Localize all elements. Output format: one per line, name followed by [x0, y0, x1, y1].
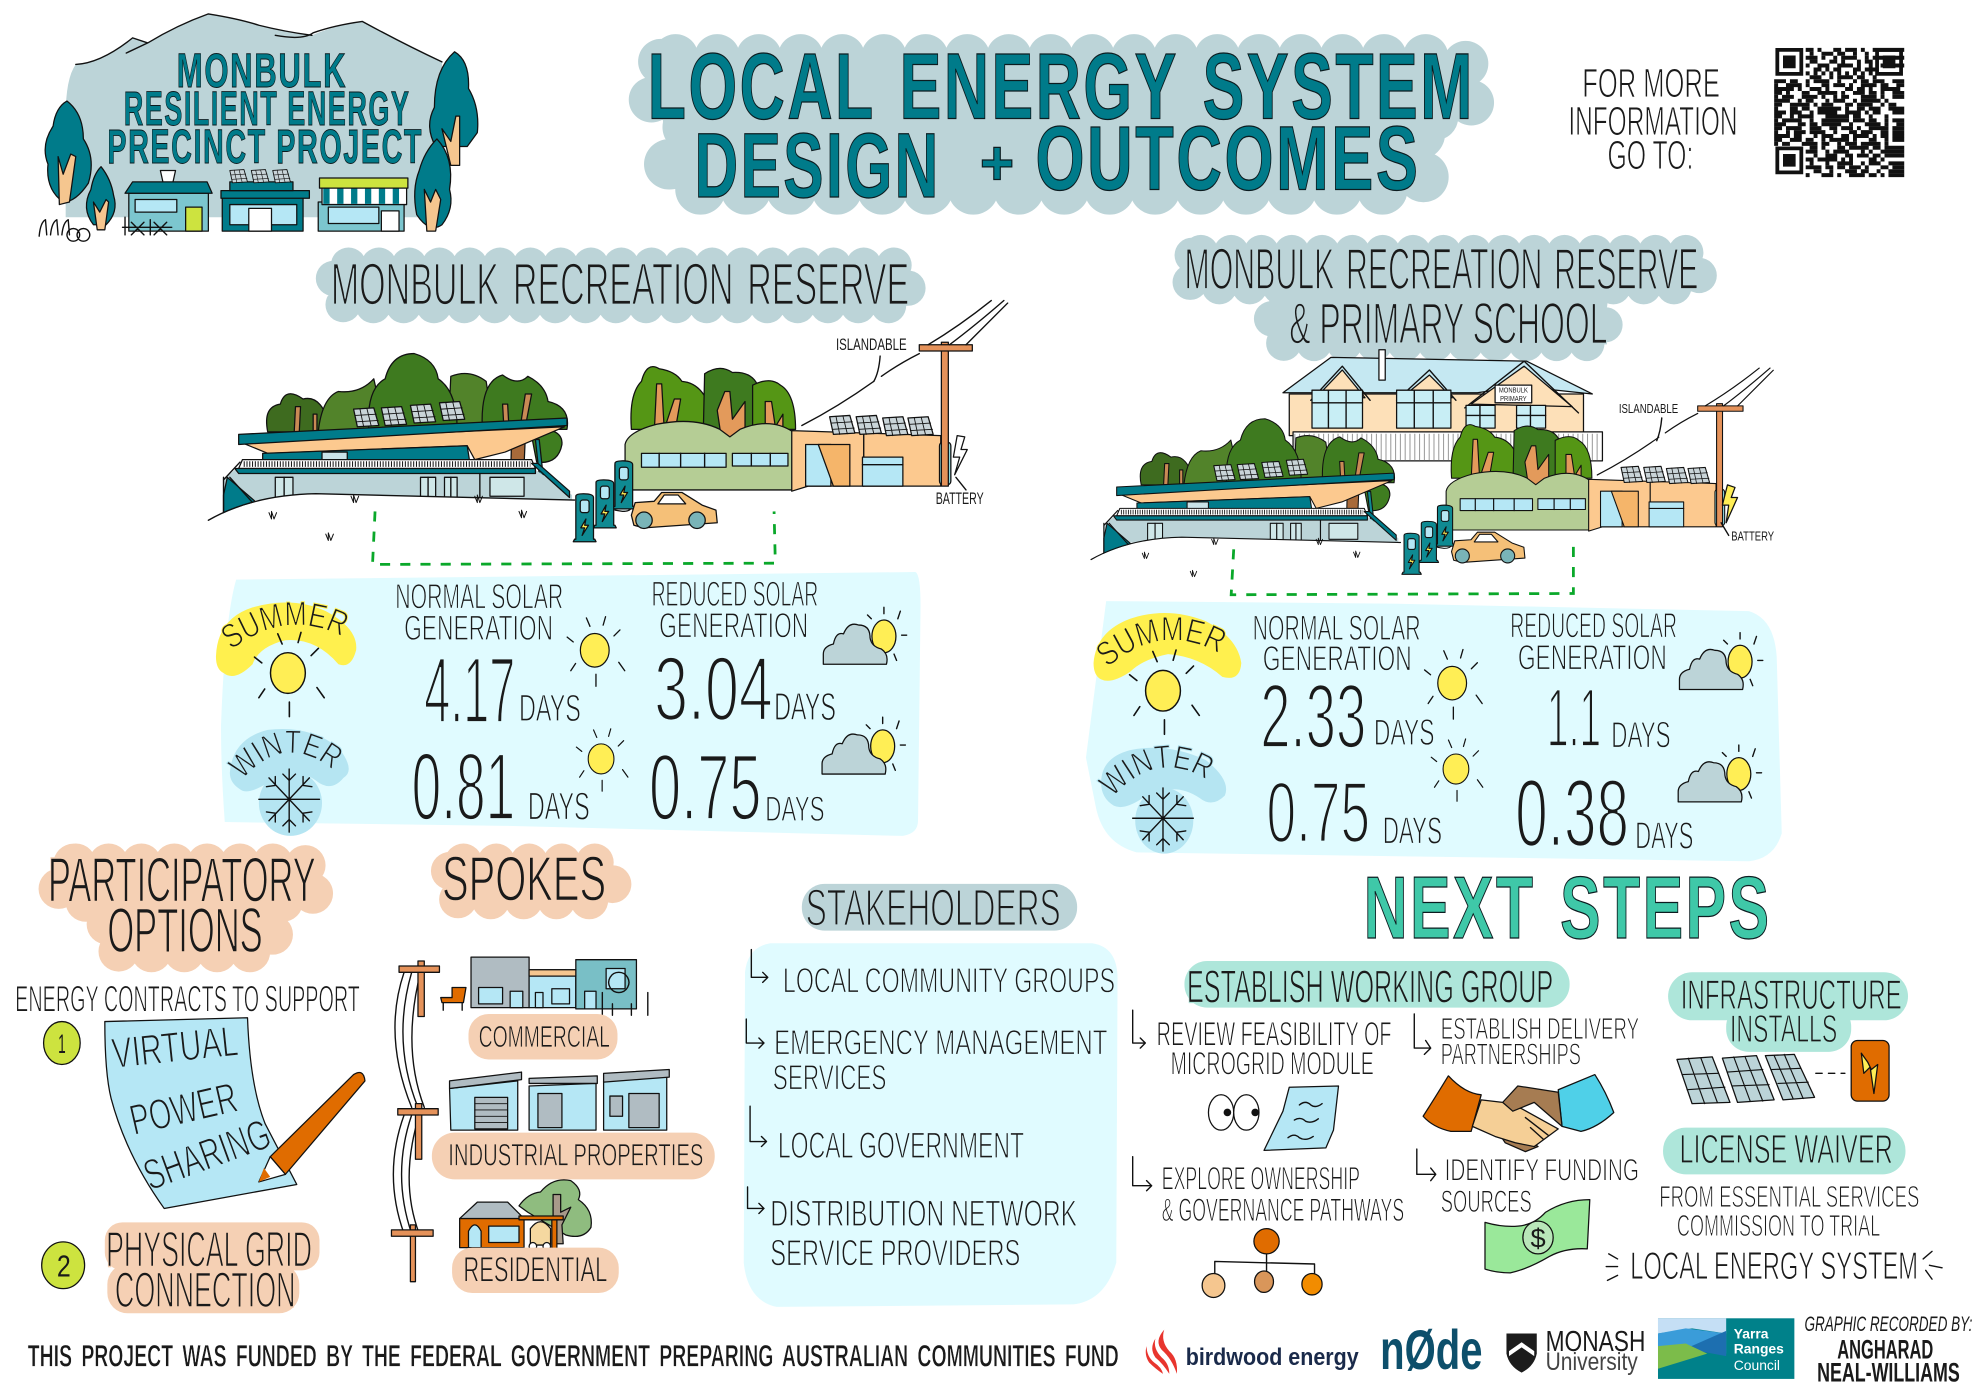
icon: sun normal summer	[567, 617, 625, 686]
more information note	[1568, 60, 1738, 178]
heading: establish working group: ESTABLISH WORKING GROUP	[1187, 961, 1553, 1013]
icon: money note: $	[1530, 1224, 1546, 1254]
logo: Monash University: MONASH	[1546, 1326, 1645, 1358]
recreation centre illustration	[202, 354, 575, 546]
stakeholder: distribution network service providers: SERVICE PROVIDERS	[770, 1232, 1020, 1273]
footer: funding statement: THIS PROJECT WAS FUNDED BY THE FEDERAL GOVERNMENT PREPARING AUSTRALIAN COMMUNITIES FUND	[28, 1337, 1119, 1373]
more information note: FOR MORE	[1582, 60, 1720, 106]
panel: stakeholders	[744, 879, 1118, 1307]
winter badge: WINTER	[1096, 744, 1214, 794]
column label: reduced solar generation: REDUCED SOLAR	[652, 575, 818, 614]
winter badge	[226, 729, 349, 836]
scene: recreation reserve	[202, 301, 1008, 564]
stakeholder: emergency management services: SERVICES	[773, 1059, 886, 1098]
school sign: PRIMARY	[1500, 394, 1527, 403]
icon: eyes reading document	[1208, 1086, 1339, 1150]
label: islandable: ISLANDABLE	[836, 335, 907, 354]
icon: cloud sun summer	[1679, 633, 1763, 689]
label: battery: BATTERY	[936, 489, 984, 508]
icon: pencil	[259, 1072, 365, 1182]
green dashed link	[373, 511, 775, 564]
icon: solar panels	[1677, 1054, 1815, 1104]
icon: battery	[1851, 1040, 1889, 1101]
title text: LOCAL ENERGY SYSTEM	[648, 34, 1475, 139]
option 2: physical grid connection	[105, 1221, 319, 1318]
stakeholder: local government	[750, 1106, 1024, 1166]
heading: Monbulk Recreation Reserve: MONBULK RECREATION RESERVE	[331, 250, 909, 317]
stat: winter normal: DAYS	[1383, 811, 1442, 853]
number 2 badge: 2	[57, 1251, 71, 1284]
title text: +	[980, 128, 1018, 198]
school sign	[1495, 385, 1532, 403]
step: review feasibility: MICROGRID MODULE	[1171, 1045, 1374, 1082]
stat: summer normal: DAYS	[1374, 712, 1434, 753]
logo: birdwood energy: birdwood energy	[1186, 1344, 1359, 1371]
stat: summer normal: 2.33	[1260, 667, 1366, 768]
label: industrial properties	[432, 1133, 715, 1179]
scene: reserve and primary school	[1086, 350, 1774, 595]
title text: DESIGN	[695, 114, 941, 217]
label: residential: RESIDENTIAL	[463, 1251, 607, 1290]
option 1: virtual power sharing document: SHARING	[137, 1110, 277, 1200]
heading: infrastructure installs	[1668, 971, 1908, 1052]
stat: winter reduced: DAYS	[1635, 816, 1693, 858]
label: battery: BATTERY	[1731, 528, 1774, 543]
text: license waiver detail	[1659, 1181, 1919, 1243]
stat: summer reduced: DAYS	[1611, 715, 1671, 756]
heading: Monbulk Recreation Reserve and Primary School	[1184, 237, 1700, 356]
battery leader	[1721, 523, 1729, 535]
battery leader	[956, 477, 966, 490]
step: identify funding sources: IDENTIFY FUNDING	[1445, 1152, 1639, 1188]
icon: money note	[1485, 1200, 1590, 1273]
column label: normal solar generation	[1253, 609, 1421, 679]
icon: cloud sun winter	[822, 717, 905, 774]
column label: reduced solar generation: GENERATION	[1518, 638, 1667, 677]
logo: Monash University	[1506, 1326, 1645, 1376]
column label: reduced solar generation: GENERATION	[659, 607, 808, 646]
panel: spokes	[391, 844, 715, 1293]
column label: normal solar generation: GENERATION	[404, 609, 553, 648]
icon: lightning	[953, 436, 967, 475]
column label: normal solar generation: NORMAL SOLAR	[395, 578, 563, 617]
stat: summer normal: 4.17	[424, 637, 515, 742]
connector dashes	[1816, 1072, 1845, 1074]
stat: summer reduced: 3.04	[654, 639, 773, 740]
green dashed link	[1231, 543, 1573, 595]
column label: reduced solar generation	[1510, 607, 1677, 677]
logo: Monbulk Resilient Energy Precinct Project	[39, 14, 478, 241]
heading: spokes: SPOKES	[442, 844, 606, 914]
credit: graphic recorder	[1804, 1312, 1972, 1387]
community centre, chargers and car illustration	[573, 301, 1008, 542]
option 1: virtual power sharing document: POWER	[125, 1074, 242, 1145]
panel background	[1086, 601, 1782, 861]
logo: Monash University: University	[1546, 1348, 1638, 1376]
icon: summer sun	[255, 632, 324, 717]
panel: reserve and school solar days	[1086, 601, 1782, 867]
logo: node: nØde	[1380, 1319, 1482, 1381]
stakeholder: local community groups: LOCAL COMMUNITY GROUPS	[783, 962, 1115, 1001]
label: commercial	[468, 1014, 617, 1059]
label: industrial properties: INDUSTRIAL PROPERTIES	[448, 1137, 703, 1173]
icon: sun normal winter	[576, 729, 628, 791]
column label: normal solar generation: GENERATION	[1263, 640, 1412, 679]
number 1 badge	[44, 1022, 80, 1064]
stakeholder: emergency management services	[746, 1019, 1107, 1098]
panel: reserve solar days	[216, 572, 920, 841]
community centre, chargers and car illustration	[1402, 368, 1773, 574]
sub text: energy contracts: ENERGY CONTRACTS TO SUPPORT	[15, 978, 360, 1019]
logo: Yarra Ranges Council: Ranges	[1734, 1341, 1784, 1357]
icon: sun normal winter	[1431, 739, 1483, 801]
number 2 badge	[42, 1242, 85, 1289]
heading: participatory options: OPTIONS	[107, 896, 263, 966]
column label: reduced solar generation	[652, 575, 818, 646]
title text	[648, 34, 1475, 217]
column label: normal solar generation: NORMAL SOLAR	[1253, 609, 1421, 648]
stat: winter reduced: 0.38	[1515, 760, 1629, 867]
stakeholder: distribution network service providers	[748, 1187, 1077, 1273]
commercial buildings	[441, 957, 648, 1015]
icon: cloud sun summer	[823, 607, 907, 664]
more information note: INFORMATION	[1568, 98, 1738, 144]
column label: reduced solar generation: REDUCED SOLAR	[1510, 607, 1677, 646]
industrial buildings	[450, 1070, 669, 1130]
logo title text: RESILIENT ENERGY	[124, 83, 410, 136]
icon: snowflake	[259, 769, 319, 832]
QR code	[1774, 48, 1904, 175]
logo people, bike and cafe tables	[39, 217, 172, 241]
icon: summer sun	[1130, 650, 1199, 734]
residential house, tree and car	[460, 1180, 591, 1250]
summer badge	[216, 601, 356, 676]
option 2: physical grid connection: PHYSICAL GRID	[106, 1221, 312, 1278]
winter badge: WINTER	[226, 730, 342, 776]
label: residential	[452, 1248, 619, 1293]
logo title text	[107, 45, 423, 174]
panel: next steps	[1133, 858, 1942, 1297]
step: identify funding sources: SOURCES	[1441, 1183, 1532, 1219]
step: review feasibility: REVIEW FEASIBILITY OF	[1157, 1016, 1392, 1054]
title text: OUTCOMES	[1035, 108, 1421, 209]
summer badge: SUMMER	[221, 601, 348, 646]
icon: cloud sun winter	[1678, 745, 1762, 802]
stakeholder list background	[744, 943, 1118, 1307]
stat: summer reduced: 1.1	[1547, 671, 1601, 764]
stakeholder: local government: LOCAL GOVERNMENT	[778, 1125, 1024, 1166]
recreation centre illustration	[1086, 419, 1400, 581]
icon: lightning	[1722, 485, 1738, 523]
stat: winter normal: 0.75	[1267, 765, 1370, 861]
heading: Monbulk Recreation Reserve	[331, 250, 909, 317]
heading: license waiver	[1663, 1126, 1905, 1174]
option 1: virtual power sharing document	[105, 1017, 297, 1208]
step: explore ownership	[1133, 1157, 1404, 1228]
islandable leader line	[874, 356, 880, 381]
icon: handshake	[1423, 1075, 1614, 1152]
step: explore ownership: & GOVERNANCE PATHWAYS	[1162, 1191, 1404, 1228]
power poles and wires	[391, 961, 439, 1282]
heading: stakeholders	[802, 879, 1077, 937]
winter badge	[1096, 744, 1226, 854]
heading: stakeholders: STAKEHOLDERS	[806, 879, 1061, 937]
column label: normal solar generation	[395, 578, 563, 648]
step: establish delivery partnerships	[1414, 1013, 1639, 1071]
heading: next steps: NEXT STEPS	[1364, 858, 1772, 957]
logo: Yarra Ranges Council: Council	[1734, 1357, 1780, 1373]
logo trees	[45, 52, 478, 231]
step: review feasibility	[1133, 1010, 1392, 1082]
option 1: virtual power sharing document: VIRTUAL	[110, 1017, 240, 1078]
islandable leader line	[1657, 418, 1662, 441]
logo: Yarra Ranges Council	[1658, 1318, 1794, 1379]
heading: infrastructure installs: INSTALLS	[1730, 1008, 1837, 1051]
number 1 badge: 1	[58, 1029, 66, 1059]
heading: participatory options	[48, 846, 316, 966]
stat: winter reduced: 0.75	[649, 735, 761, 840]
stat: winter reduced: DAYS	[765, 790, 825, 829]
logo shop buildings	[125, 170, 408, 231]
step: establish delivery partnerships: ESTABLISH DELIVERY	[1441, 1013, 1639, 1046]
panel background	[221, 572, 921, 836]
heading: participatory options: PARTICIPATORY	[48, 846, 316, 916]
logo: Yarra Ranges Council: Yarra	[1734, 1326, 1769, 1342]
heading: spokes	[442, 844, 612, 914]
heading: Monbulk Recreation Reserve and Primary School: & PRIMARY SCHOOL	[1289, 291, 1607, 356]
step: establish delivery partnerships: PARTNERSHIPS	[1441, 1038, 1581, 1071]
icon: org chart	[1202, 1229, 1322, 1297]
title block	[648, 34, 1475, 217]
step: identify funding sources	[1417, 1149, 1639, 1219]
step: explore ownership: EXPLORE OWNERSHIP	[1162, 1160, 1360, 1197]
primary school illustration	[1283, 350, 1602, 461]
logo: birdwood energy	[1146, 1330, 1359, 1374]
panel: participatory options	[15, 846, 365, 1318]
stat: summer normal: DAYS	[519, 688, 581, 730]
stakeholder: local community groups	[751, 950, 1115, 1001]
title cloud	[650, 57, 1474, 189]
logo title text: MONBULK	[177, 45, 347, 98]
logo title text: PRECINCT PROJECT	[107, 121, 423, 174]
more information note: GO TO:	[1607, 132, 1693, 178]
heading: establish working group	[1184, 961, 1570, 1013]
option 2: physical grid connection: CONNECTION	[115, 1261, 295, 1318]
stakeholder: distribution network service providers: DISTRIBUTION NETWORK	[770, 1193, 1077, 1234]
label: commercial: COMMERCIAL	[479, 1021, 610, 1054]
logo mountain backdrop	[66, 14, 442, 217]
icon: snowflake	[1133, 788, 1193, 851]
stat: summer reduced: DAYS	[774, 686, 836, 729]
icon: sun normal summer	[1425, 650, 1482, 719]
stat: winter normal: 0.81	[412, 734, 515, 841]
stat: winter normal: DAYS	[528, 786, 590, 829]
summer badge: SUMMER	[1096, 618, 1226, 664]
school sign: MONBULK	[1499, 386, 1528, 395]
label: islandable: ISLANDABLE	[1619, 401, 1678, 416]
stakeholder: emergency management services: EMERGENCY MANAGEMENT	[774, 1023, 1107, 1062]
